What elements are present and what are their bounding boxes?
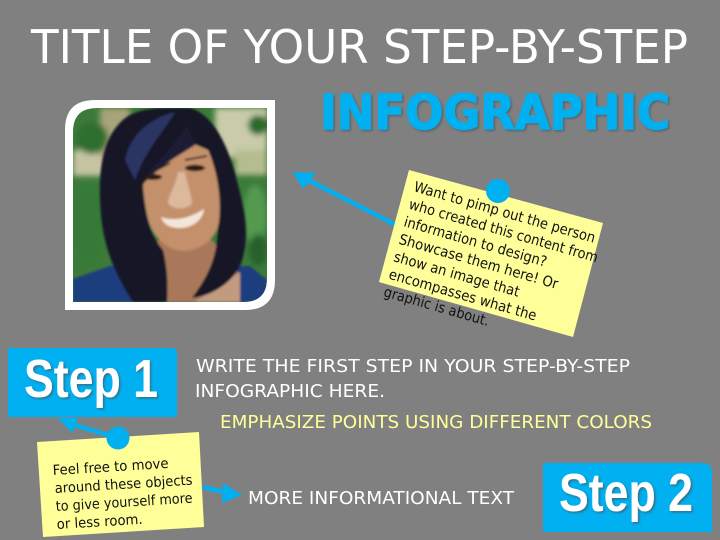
- hair: [100, 108, 246, 302]
- step 1 description: INFOGRAPHIC HERE.: [195, 381, 385, 402]
- eyes: [144, 174, 162, 180]
- emphasis text: EMPHASIZE POINTS USING DIFFERENT COLORS: [220, 412, 652, 433]
- neck and chest: [158, 240, 240, 302]
- note text: [52, 456, 193, 533]
- step 2 badge: Step 2: [559, 463, 693, 523]
- note text: Showcase them here! Or: [397, 232, 560, 293]
- note text: who created this content from: [407, 197, 600, 266]
- shoulders: [73, 266, 267, 302]
- note: about the author: [379, 170, 605, 354]
- title: TITLE OF YOUR STEP-BY-STEP: [30, 20, 688, 74]
- arrow: note to step 1: [58, 418, 118, 438]
- note text: around these objects: [54, 473, 193, 497]
- note text: encompasses what the: [387, 267, 538, 325]
- step 1 description: [195, 356, 630, 402]
- brows: [153, 156, 207, 172]
- pin: [486, 179, 510, 203]
- chest light: [195, 272, 240, 302]
- step 1 description: WRITE THE FIRST STEP IN YOUR STEP-BY-STEP: [196, 356, 630, 377]
- note: move objects: [37, 426, 204, 537]
- informational text: MORE INFORMATIONAL TEXT: [248, 488, 515, 509]
- note text: Want to pimp out the person: [412, 179, 597, 247]
- arrow: note to portrait: [293, 172, 396, 225]
- note text: show an image that: [392, 249, 521, 301]
- face: [143, 141, 220, 251]
- title: [30, 20, 688, 141]
- note text: Feel free to move: [52, 456, 169, 479]
- note text: to give yourself more: [55, 491, 193, 515]
- arrow: note to informational text: [203, 483, 242, 503]
- nose highlight: [168, 172, 192, 208]
- note text: or less room.: [56, 512, 143, 533]
- smile: [161, 209, 204, 228]
- note text: graphic is about.: [382, 284, 491, 330]
- note text: [382, 179, 605, 354]
- portrait photo with white frame: [65, 100, 275, 310]
- pin: [106, 426, 130, 450]
- hair side lock: [145, 125, 195, 182]
- note text: information to design?: [402, 214, 549, 271]
- title: INFOGRAPHIC: [320, 85, 670, 141]
- step 1 badge: Step 1: [24, 349, 158, 409]
